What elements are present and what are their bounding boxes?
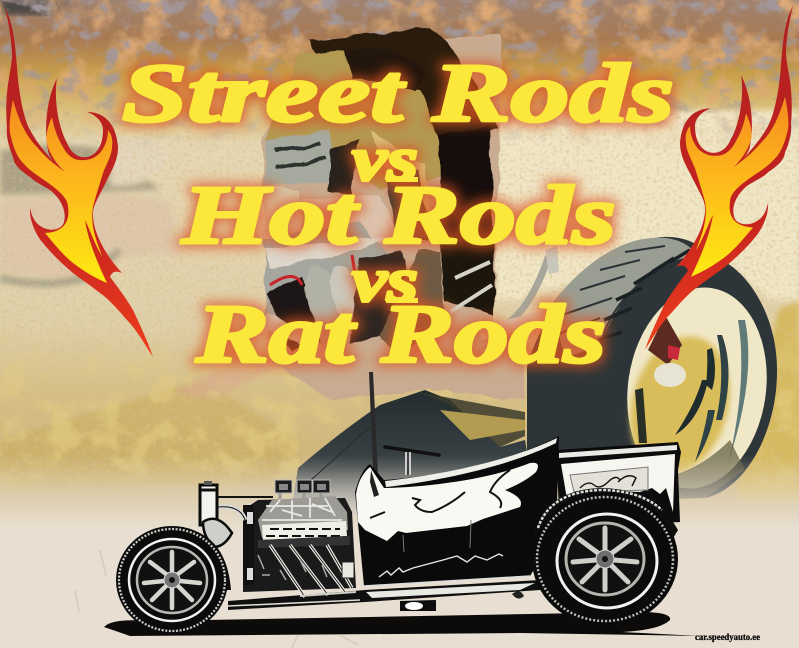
title line: Hot Rods: Hot Rods — [181, 169, 616, 262]
dark wedge behind the car — [290, 390, 535, 520]
exhaust headers — [270, 545, 356, 597]
source credit: car.speedyauto.ee — [695, 633, 760, 643]
fade into beige paper — [0, 455, 799, 530]
rear wheel — [532, 492, 678, 626]
car body tub — [355, 436, 559, 586]
title line: Rat Rods: Rat Rods — [195, 288, 606, 381]
radiator and rod — [200, 481, 273, 525]
ground shadow — [104, 612, 700, 636]
engine bay details — [270, 246, 559, 333]
rear fender — [533, 488, 678, 540]
engine bay photo — [262, 28, 525, 400]
windshield post and brace — [369, 372, 379, 495]
big photo wheel — [527, 237, 779, 500]
frame and running board — [228, 580, 540, 611]
truck bed — [556, 442, 681, 528]
white flame paint — [356, 463, 538, 541]
steering wheel — [385, 447, 439, 475]
title — [122, 47, 674, 381]
icon: right flame — [645, 6, 793, 350]
headlight — [203, 519, 232, 547]
title line: Street Rods: Street Rods — [122, 47, 674, 140]
windshield bracket — [370, 470, 379, 497]
icon: left flame — [5, 8, 153, 357]
engine — [243, 480, 356, 597]
title: first vs: vs — [352, 126, 418, 194]
illustration: black and white hot rod — [104, 372, 700, 636]
front fender — [172, 527, 231, 590]
front wheel — [116, 526, 228, 634]
title: second vs: vs — [352, 247, 418, 315]
